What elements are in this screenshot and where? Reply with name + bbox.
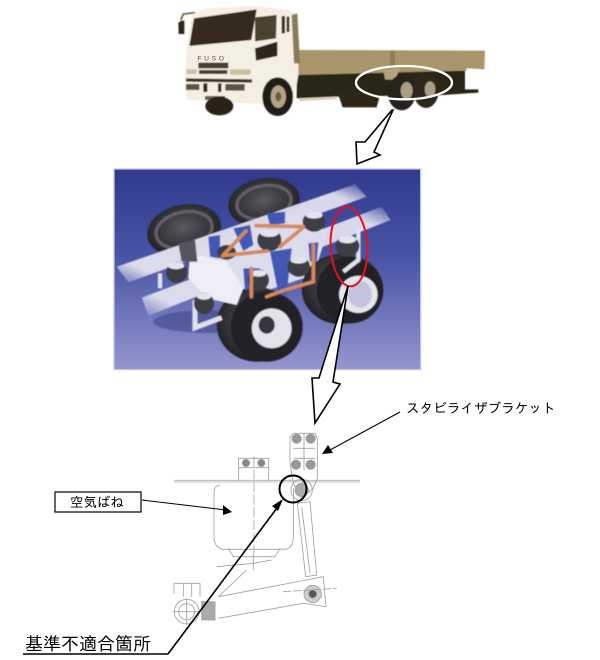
label: non-conforming location: 基準不適合箇所 <box>25 634 151 654</box>
cab windows <box>189 9 257 46</box>
frame rails <box>117 184 367 282</box>
stabilizer rod <box>297 502 317 577</box>
callout: non-conforming location marker <box>23 476 306 654</box>
callout: white ellipse on rear axle <box>356 66 452 99</box>
arrow: air spring leader <box>142 500 232 515</box>
truck cab <box>185 6 298 104</box>
blue brackets <box>208 212 318 295</box>
label box: air spring <box>55 492 141 512</box>
rear tires <box>142 197 226 263</box>
upper mount plate <box>239 458 269 481</box>
cab grille and bumper <box>198 63 228 74</box>
stabilizer bracket line drawing <box>173 433 360 625</box>
arrow: stabilizer bracket leader <box>322 412 400 454</box>
arrow: truck to suspension <box>356 110 393 164</box>
shadow under chassis <box>153 310 267 333</box>
label box: air spring: 空気ばね <box>70 494 124 510</box>
label: stabilizer bracket: スタビライザブラケット <box>406 401 556 416</box>
stabilizer arm <box>217 560 326 618</box>
truck chassis <box>297 71 478 98</box>
orange links <box>223 226 313 297</box>
truck bed <box>298 50 485 76</box>
suspension illustration panel <box>114 169 421 370</box>
truck photo <box>178 6 485 116</box>
arrow: suspension to bracket drawing <box>312 286 348 423</box>
white pipes <box>195 300 222 328</box>
bracket <box>290 433 317 498</box>
air spring outline <box>214 485 293 549</box>
center crossmember fill <box>188 208 327 298</box>
frame line <box>174 480 360 482</box>
air springs <box>166 212 359 314</box>
cab mirror <box>178 21 184 34</box>
cab emblem and name: FUSO <box>197 56 227 63</box>
truck wheels <box>205 97 233 115</box>
white axle housing <box>188 253 243 305</box>
front left tire <box>217 287 297 362</box>
callout: red ellipse on stabilizer bracket <box>329 206 369 287</box>
axle <box>174 599 199 624</box>
front right tire <box>302 254 378 324</box>
